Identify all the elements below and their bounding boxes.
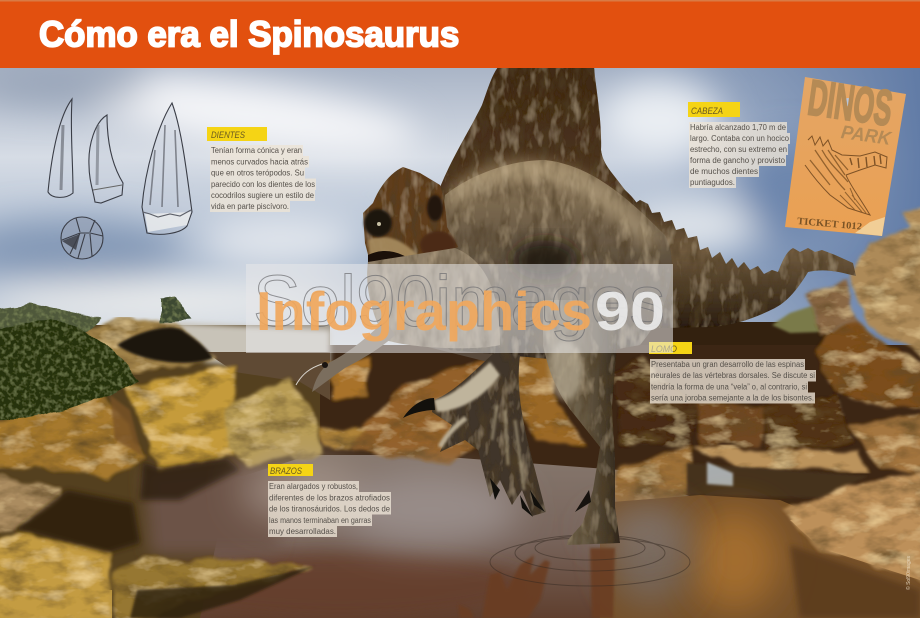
watermark outline text: Sol90images: [253, 262, 665, 342]
text: dientes: Tenían forma cónica y eran: [211, 146, 302, 155]
far leg: [431, 348, 492, 362]
callout: dientes: [207, 127, 316, 212]
distant tree: [160, 296, 193, 322]
text: brazos: muy desarrolladas.: [269, 527, 336, 536]
mist over the water: [240, 458, 690, 548]
text: dientes: parecido con los dientes de los: [211, 180, 315, 189]
tooth 2: [89, 115, 123, 203]
text: brazos: diferentes de los brazos atrofiados: [269, 494, 390, 502]
rocks behind the dinosaur: [318, 355, 868, 510]
text: cabeza: forma de gancho y provisto: [690, 156, 786, 165]
watermark panel: [246, 262, 673, 353]
head: [363, 167, 458, 262]
ticket dinosaur sketch: [805, 136, 887, 215]
rocks on the left: [0, 320, 320, 618]
neck and chest under watermark: [367, 248, 500, 348]
text: cabeza: estrecho, con su extremo en: [690, 145, 787, 154]
callout: lomo: [649, 342, 816, 404]
pale distant flat: [170, 322, 330, 378]
callout: brazos: [268, 464, 391, 537]
ticket corner curl: [855, 217, 885, 236]
text: dientes: cocodrilos sugiere un estilo de: [211, 191, 315, 200]
ticket number: TICKET 1012: [797, 216, 862, 233]
torso: [430, 160, 672, 360]
spinosaurus: [296, 67, 856, 545]
label: lomo: LOMO: [651, 344, 678, 355]
label: brazos: BRAZOS: [270, 466, 303, 477]
ticket hole: [844, 98, 852, 106]
near arm with claws: [432, 352, 546, 516]
tan shelf: [690, 446, 868, 472]
tail: [634, 200, 856, 328]
dark pool: [687, 463, 868, 498]
text: brazos: [268, 481, 391, 537]
text: dientes: que en otros terópodos. Su: [211, 168, 304, 178]
tooth 1: [48, 99, 73, 197]
text: lomo: tendría la forma de una “vela” o, al contrario, si: [651, 382, 807, 392]
text: cabeza: puntiagudos.: [690, 178, 735, 187]
text: lomo: Presentaba un gran desarrollo de las espinas: [651, 360, 804, 369]
rocks on the right: [805, 195, 920, 475]
dark cave: [117, 328, 213, 363]
misty rock wall: [143, 460, 300, 555]
ticket subheading: PARK: [840, 122, 893, 150]
text: dientes: menos curvados hacia atrás: [211, 158, 308, 166]
base ground colour: [0, 325, 330, 618]
text: lomo: [650, 359, 816, 404]
text: cabeza: [689, 122, 790, 188]
sky with clouds: [0, 60, 920, 367]
reflection in the water: [458, 548, 615, 618]
illustration: four tooth sketches: [48, 99, 192, 259]
label: lomo: [649, 342, 692, 355]
title: Cómo era el Spinosaurus: [39, 15, 459, 55]
callout: cabeza: [688, 102, 790, 188]
watermark orange text: Infographics: [256, 280, 592, 342]
green bushes: [0, 296, 213, 420]
text: brazos: Eran alargados y robustos,: [269, 482, 358, 491]
text: cabeza: Habría alcanzado 1,70 m de: [690, 123, 787, 132]
tan rock under bush: [85, 320, 215, 372]
text: brazos: las manos terminaban en garras: [269, 516, 371, 525]
header bar: [0, 0, 920, 68]
right sand bank and reflecting water: [600, 465, 920, 618]
text: cabeza: largo. Contaba con un hocico: [690, 134, 790, 143]
text: brazos: de los tiranosáuridos. Los dedos de: [269, 504, 391, 514]
water surface: [200, 455, 689, 618]
ticket: Dinos Park: [785, 69, 906, 236]
text: lomo: sería una joroba semejante a la de los bisontes.: [651, 394, 814, 402]
distant plain on the right: [772, 305, 820, 333]
small credit: © Sol90images: [905, 556, 912, 590]
text: lomo: neurales de las vértebras dorsales. Se discute si: [651, 371, 815, 380]
tooth cross section: [61, 217, 103, 259]
ripples: [490, 535, 690, 586]
small far arm: [312, 327, 388, 392]
dark crevices: [15, 490, 140, 553]
watermark white number: 90: [595, 280, 665, 342]
text: cabeza: de muchos dientes: [690, 167, 758, 176]
text: dientes: [210, 145, 316, 212]
sail: [440, 68, 636, 205]
standing leg: [543, 300, 620, 545]
text: dientes: vida en parte piscívoro.: [211, 202, 289, 211]
label: cabeza: CABEZA: [691, 106, 723, 117]
tooth 3: [142, 103, 192, 234]
label: dientes: DIENTES: [211, 130, 246, 141]
